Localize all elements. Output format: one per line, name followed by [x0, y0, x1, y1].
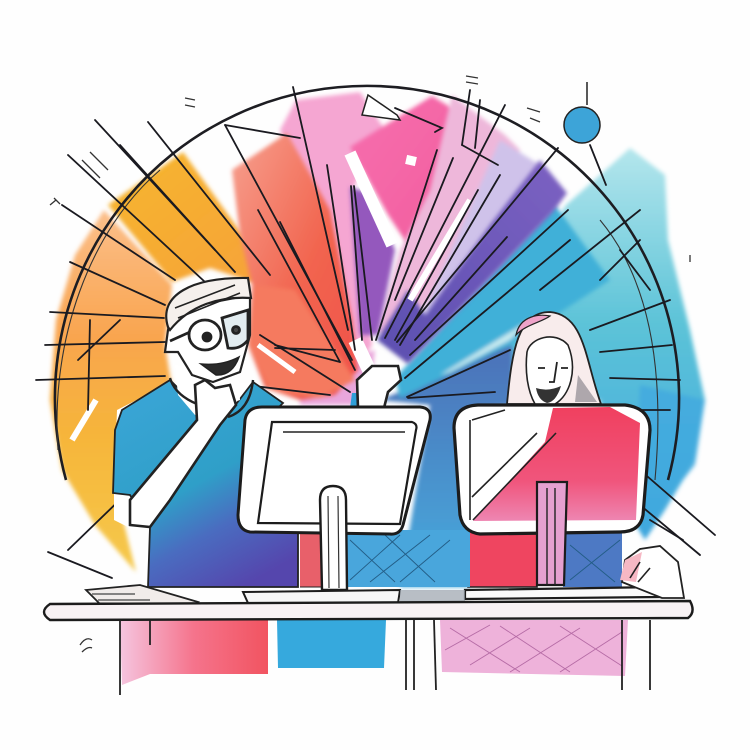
man: arm and hand — [130, 380, 236, 527]
woman: hair — [507, 312, 601, 404]
monitor right — [454, 405, 663, 599]
red block under left monitor — [298, 527, 322, 587]
plate of papers — [86, 585, 198, 616]
monitor left — [238, 407, 430, 603]
watercolor: cyan right wash — [420, 148, 705, 540]
table color wash: pink and red — [120, 620, 268, 685]
monitor left: base — [243, 590, 400, 603]
watercolor: purple fan — [377, 160, 567, 364]
woman: smile — [536, 386, 561, 403]
man: glasses — [170, 310, 248, 350]
woman: face — [526, 337, 572, 404]
blue lattice patch — [346, 530, 470, 587]
woman: eyes and nose — [538, 362, 568, 382]
watercolor: pink column — [280, 92, 385, 405]
woman: hair dots — [575, 375, 597, 402]
monitor left: screen — [258, 422, 416, 524]
arc: large circular outline — [55, 86, 679, 480]
man: collar — [170, 378, 253, 417]
arc: inner outline — [57, 170, 658, 480]
table top — [44, 601, 693, 620]
icon: blue circle — [564, 82, 600, 143]
watercolor: violet column — [350, 187, 395, 335]
woman: pink hair cap — [516, 315, 550, 335]
monitor left: stand — [320, 486, 347, 590]
small sketch marks — [50, 76, 690, 652]
man: neck — [175, 365, 240, 415]
watercolor: yellow and orange left fan — [50, 152, 272, 572]
sketched square — [362, 95, 400, 120]
monitor right: base — [465, 587, 663, 599]
watercolor: central blue wash — [380, 205, 610, 587]
man: shirt — [113, 380, 298, 587]
table legs — [120, 620, 650, 695]
man: raised fist — [357, 366, 401, 408]
radial sketch lines — [36, 87, 715, 578]
monitor right: frame — [454, 405, 650, 534]
monitor right: red panel — [473, 407, 640, 521]
table pattern lines — [445, 625, 622, 672]
man — [113, 278, 401, 590]
monitor left: screen line — [283, 431, 405, 433]
watercolor: lilac band — [378, 95, 540, 345]
watercolor: hot pink top — [350, 96, 460, 245]
monitor left: frame — [238, 407, 430, 534]
man: blue sleeve cuff — [350, 393, 385, 408]
red block under right monitor — [468, 530, 537, 587]
woman — [507, 312, 601, 404]
monitor right: stand — [537, 482, 567, 585]
table color wash: pink pattern — [440, 620, 628, 676]
man: face — [165, 295, 250, 382]
light fan streaks — [72, 153, 470, 440]
man: smile — [201, 357, 239, 375]
blue block under right monitor — [563, 530, 622, 587]
man: white sleeve halo — [114, 383, 300, 590]
man: hair band — [166, 278, 251, 330]
table color wash: blue — [277, 620, 386, 668]
watercolor: red fan — [232, 133, 358, 400]
table shadow wash — [400, 590, 465, 602]
monitor right: glare lines — [470, 410, 556, 520]
woman's hand on mouse — [620, 546, 684, 598]
